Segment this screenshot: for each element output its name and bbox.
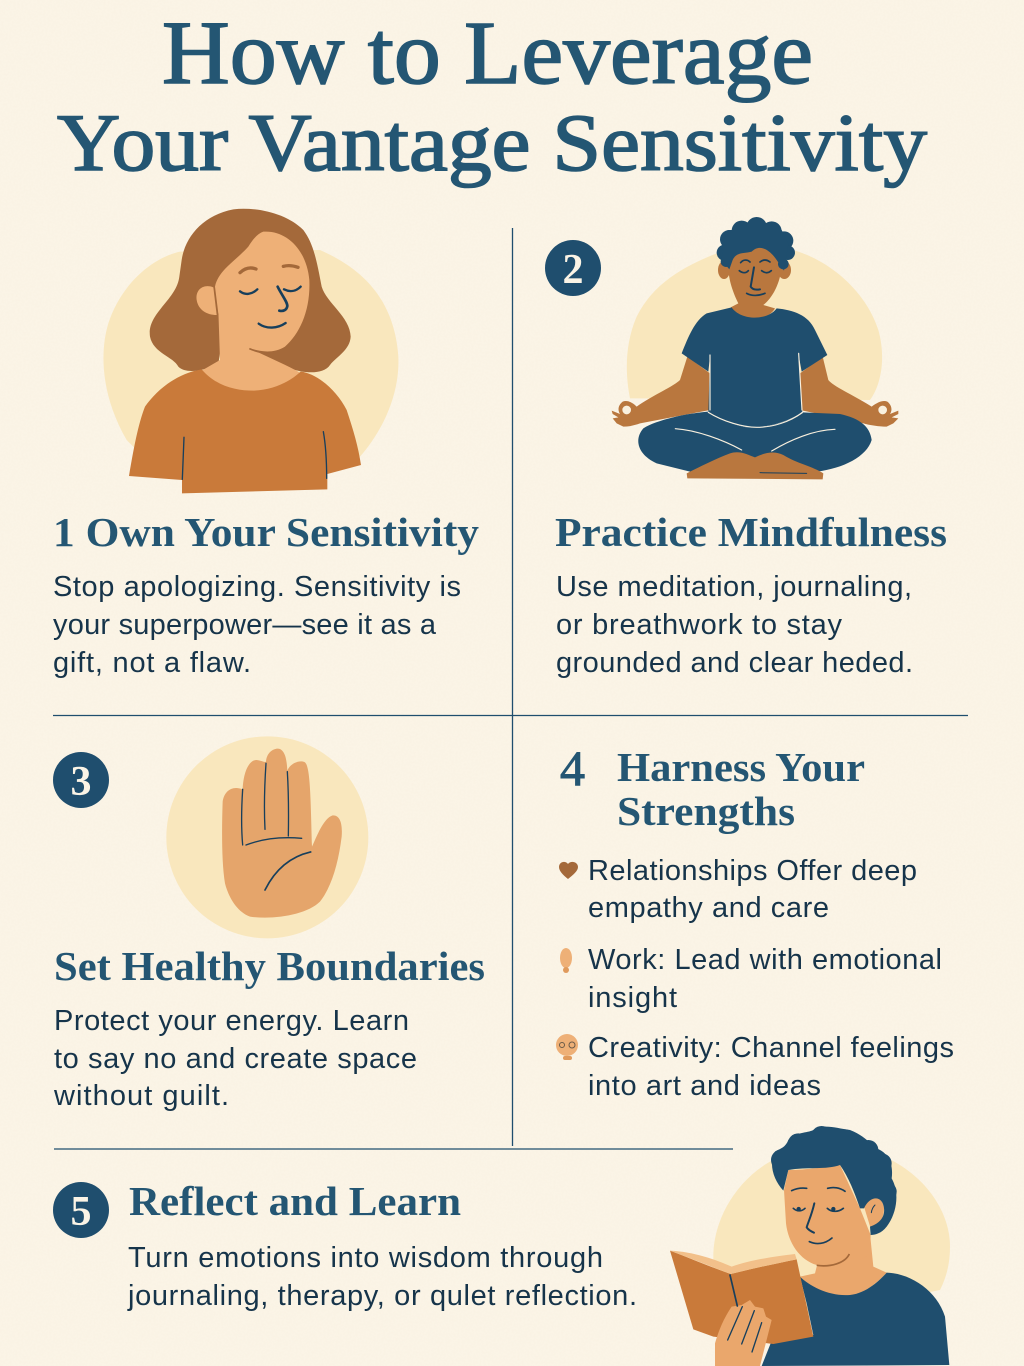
text: relationships: Relationships Offer deep xyxy=(588,855,917,887)
badge: number 5 xyxy=(53,1182,109,1238)
icon: heart xyxy=(559,862,578,879)
heading: set healthy boundaries: Set Healthy Boundaries xyxy=(54,943,485,989)
text: set healthy boundaries body xyxy=(53,1005,417,1112)
text: work xyxy=(588,944,942,1014)
illustration: woman with closed eyes xyxy=(103,209,398,493)
text: reflect and learn body: journaling, therapy, or qulet reflection. xyxy=(127,1280,637,1312)
text: work: Work: Lead with emotional xyxy=(588,944,942,976)
heading: practice mindfulness: Practice Mindfulness xyxy=(555,509,947,555)
text: practice mindfulness body: grounded and clear heded. xyxy=(556,647,913,679)
text: own your sensitivity body xyxy=(53,571,461,679)
badge: number 2: 2 xyxy=(562,247,584,293)
text: creativity: Creativity: Channel feelings xyxy=(588,1032,954,1064)
text: practice mindfulness body xyxy=(556,571,913,679)
panel: reflect and learn xyxy=(53,1126,950,1366)
panel: set healthy boundaries xyxy=(53,736,485,1112)
hair xyxy=(717,217,795,271)
text: set healthy boundaries body: Protect your energy. Learn xyxy=(54,1005,409,1037)
icon: lightbulb xyxy=(560,948,572,973)
text: practice mindfulness body: Use meditation, journaling, xyxy=(556,571,912,603)
icon: palette face xyxy=(556,1034,578,1060)
heading: reflect and learn: Reflect and Learn xyxy=(129,1178,461,1224)
text: set healthy boundaries body: without guilt. xyxy=(53,1080,229,1112)
text: own your sensitivity body: your superpower—see it as a xyxy=(53,609,437,641)
heading: harness your strengths xyxy=(617,744,865,834)
title xyxy=(57,4,927,188)
title: Your Vantage Sensitivity xyxy=(57,97,927,188)
heading: own your sensitivity: 1 Own Your Sensitivity xyxy=(53,509,480,555)
text: reflect and learn body: Turn emotions into wisdom through xyxy=(128,1242,603,1274)
panel: own your sensitivity xyxy=(53,209,480,679)
text: own your sensitivity body: Stop apologizing. Sensitivity is xyxy=(53,571,461,603)
text: own your sensitivity body: gift, not a flaw. xyxy=(53,647,251,679)
text: reflect and learn body xyxy=(127,1242,637,1312)
text: relationships: empathy and care xyxy=(588,892,829,924)
heading: harness your strengths: Harness Your xyxy=(617,744,865,790)
badge: number 5: 5 xyxy=(70,1189,92,1235)
number 4: 4 xyxy=(560,740,585,796)
illustration: raised hand xyxy=(166,736,368,938)
text: work: insight xyxy=(588,982,677,1014)
panel: harness your strengths xyxy=(556,740,954,1102)
text: creativity xyxy=(588,1032,954,1102)
hair curls xyxy=(771,1126,897,1202)
badge: number 3 xyxy=(53,752,109,808)
illustration: man reading a book xyxy=(670,1126,950,1366)
text: practice mindfulness body: or breathwork to stay xyxy=(556,609,842,641)
illustration: meditating man xyxy=(612,217,898,479)
title: How to Leverage xyxy=(162,4,813,103)
badge: number 3: 3 xyxy=(70,759,92,805)
panel: practice mindfulness xyxy=(545,217,947,679)
text: creativity: into art and ideas xyxy=(588,1070,821,1102)
text: relationships xyxy=(588,855,917,924)
badge: number 2 xyxy=(545,240,601,296)
heading: harness your strengths: Strengths xyxy=(617,788,795,834)
text: set healthy boundaries body: to say no and create space xyxy=(54,1043,417,1075)
